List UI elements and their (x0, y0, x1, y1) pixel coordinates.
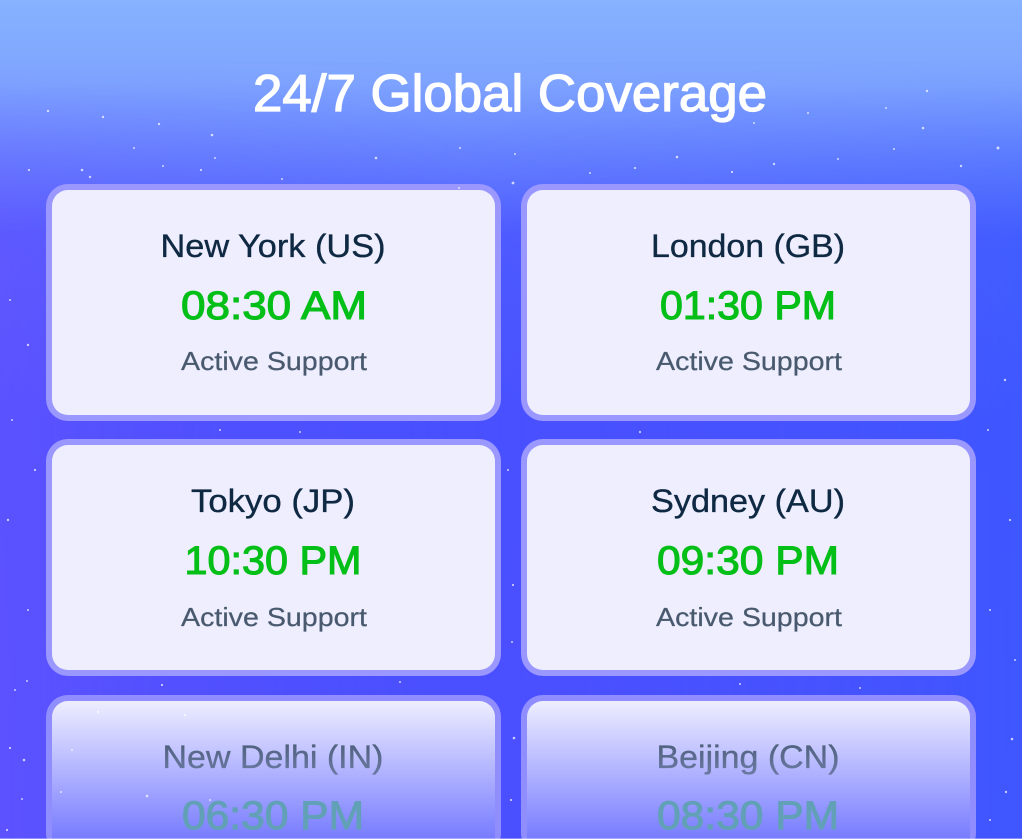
card: Beijing (faded): Beijing (CN) (656, 739, 840, 775)
card: New York: Active Support (181, 346, 368, 376)
card: Sydney (521, 439, 976, 676)
card: Beijing (faded): 08:30 PM (657, 794, 839, 838)
card: Sydney: Sydney (AU) (651, 483, 845, 519)
card: Tokyo (46, 439, 501, 676)
card: Beijing (faded) (521, 695, 976, 839)
card: Tokyo: Active Support (181, 602, 368, 632)
card: London: London (GB) (651, 228, 845, 264)
card: New York: 08:30 AM (181, 284, 367, 328)
card: New Delhi (faded) (46, 695, 501, 839)
card: London: 01:30 PM (660, 284, 836, 328)
card: London: Active Support (656, 346, 843, 376)
bottom edge highlight (0, 838, 1022, 839)
title: 24/7 Global Coverage (253, 65, 767, 123)
card: Sydney: Active Support (656, 602, 843, 632)
card: New Delhi (faded): New Delhi (IN) (162, 739, 384, 775)
card: New York: New York (US) (160, 228, 386, 264)
card: New York (46, 184, 501, 421)
card: London (521, 184, 976, 421)
card: Tokyo: Tokyo (JP) (191, 483, 355, 519)
card: Tokyo: 10:30 PM (184, 539, 362, 583)
card: New Delhi (faded): 06:30 PM (182, 794, 364, 838)
card: Sydney: 09:30 PM (657, 539, 839, 583)
